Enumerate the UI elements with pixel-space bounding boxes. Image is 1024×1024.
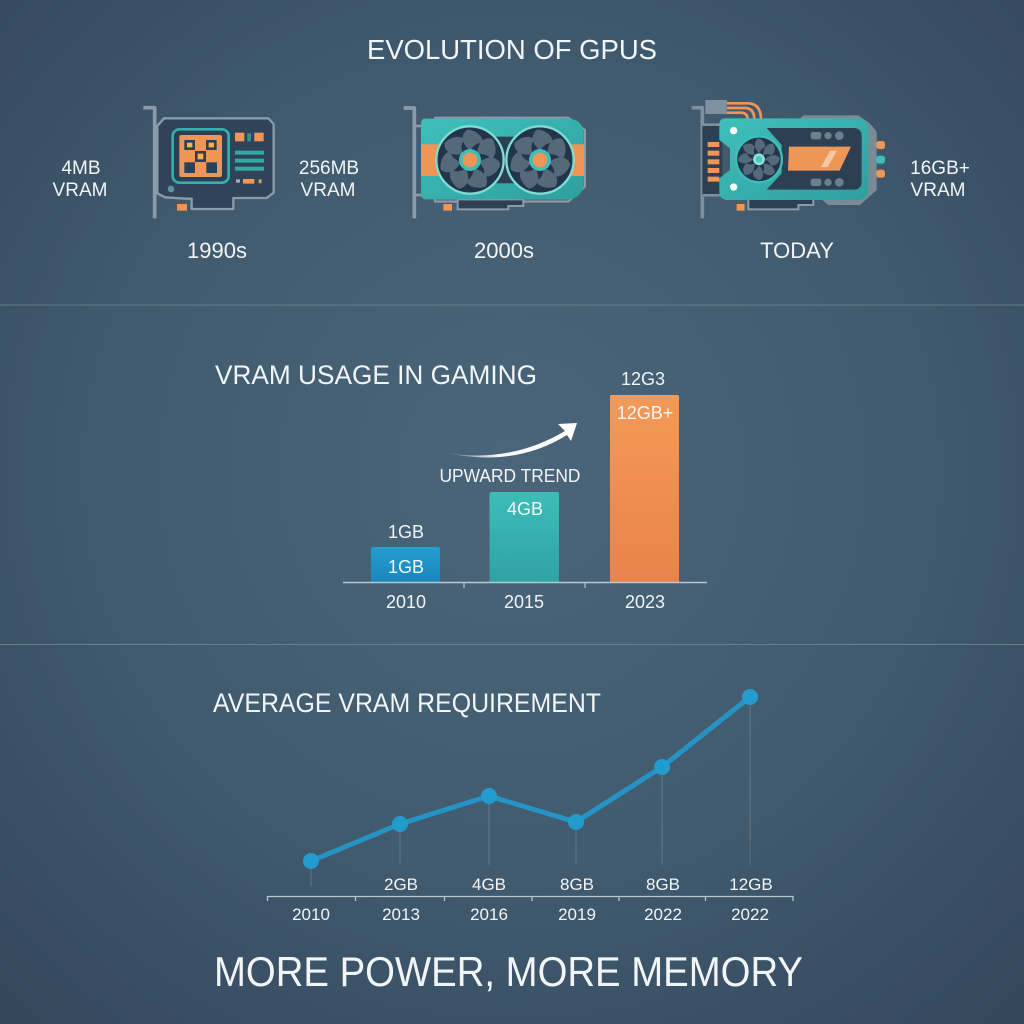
year labels [292,905,769,924]
bar chart [343,369,707,612]
panel: evolution of GPUs [53,34,970,263]
axis label: 2010: 2010 [386,592,426,612]
heading: average VRAM requirement: AVERAGE VRAM REQUIREMENT [213,688,601,718]
data points [303,689,758,869]
label: 2000s: 2000s [474,238,534,263]
label: 4MB VRAM: 4MB [61,158,101,179]
trend line [311,697,750,861]
bar: 2015 [490,492,559,582]
year labels: 2010 [292,905,330,924]
year labels: 2022 [644,905,682,924]
fan: single [736,136,782,182]
value labels: 8GB [560,875,594,894]
label: 1990s: 1990s [187,238,247,263]
bar: 2010: 1GB [388,557,424,577]
axis label: 2023: 2023 [625,592,665,612]
icon: 1990s graphics card [143,108,274,218]
bar: 2023: 12G3 [621,369,665,389]
panel: VRAM usage in gaming [215,360,707,612]
label: 256MB VRAM: VRAM [301,180,355,201]
label: 16GB+ VRAM: VRAM [911,180,965,201]
value labels: 8GB [646,875,680,894]
year labels: 2019 [558,905,596,924]
value labels [384,875,773,894]
label: today: TODAY [760,238,834,263]
year labels: 2016 [470,905,508,924]
axis [268,896,793,901]
bar: 2015: 4GB [507,499,543,519]
arrow: upward trend [446,423,577,457]
closing headline: MORE POWER, MORE MEMORY [214,948,803,995]
value labels: 12GB [729,875,773,894]
bar: 2010 [371,522,440,582]
heading: evolution of GPUs: EVOLUTION OF GPUS [367,34,657,65]
axis label: 2015: 2015 [504,592,544,612]
bar: 2023 [610,369,679,582]
heading: VRAM usage in gaming: VRAM USAGE IN GAMING [215,360,537,390]
bar: 2010: 1GB [388,522,424,542]
panel: average VRAM requirement [213,688,793,924]
icon: today graphics card [692,100,885,218]
label: upward trend: UPWARD TREND [440,466,580,486]
fan: left [436,126,504,194]
icon: 2000s graphics card [404,108,585,218]
value labels: 2GB [384,875,418,894]
label: 256MB VRAM: 256MB [299,158,359,179]
label: 4MB VRAM: VRAM [53,180,107,201]
label: 16GB+ VRAM: 16GB+ [910,158,970,179]
bar: 2023: 12GB+ [617,403,673,423]
year labels: 2013 [382,905,420,924]
axis [343,582,707,588]
line chart [268,689,793,924]
year labels: 2022 [731,905,769,924]
value labels: 4GB [472,875,506,894]
fan: right [506,126,574,194]
